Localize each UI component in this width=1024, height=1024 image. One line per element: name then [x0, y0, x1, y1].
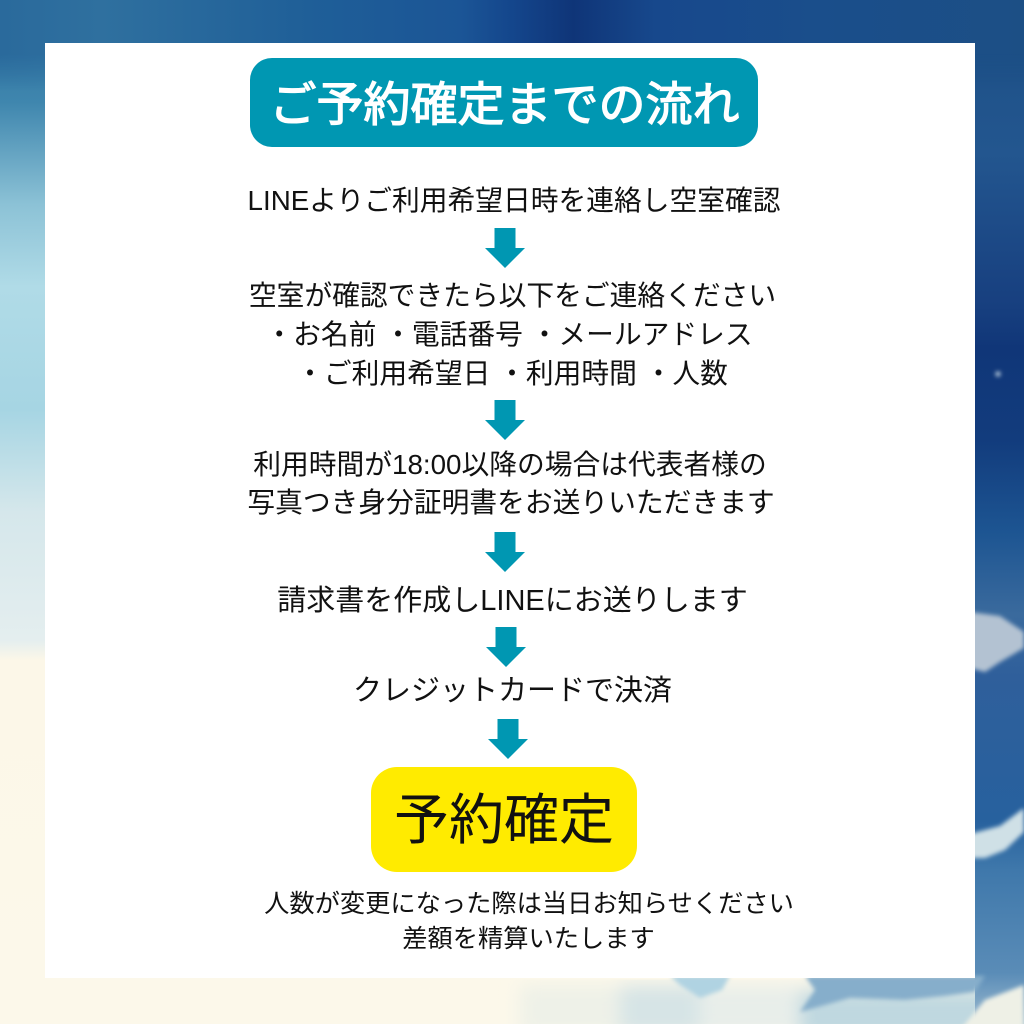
step 2 line 1: 空室が確認できたら以下をご連絡ください [249, 280, 776, 311]
step 1 text: LINEよりご利用希望日時を連絡し空室確認 [248, 185, 780, 216]
arrow 3 [485, 532, 525, 572]
arrow 5 [488, 719, 528, 759]
note line 2: 差額を精算いたします [402, 925, 655, 953]
step 4 text: 請求書を作成しLINEにお送りします [277, 585, 748, 617]
final step badge [371, 767, 637, 872]
arrow 1 [485, 228, 525, 268]
step 2 line 2: ・お名前 ・電話番号 ・メールアドレス [265, 319, 753, 350]
arrow 2 [485, 400, 525, 440]
title banner: ご予約確定までの流れ [270, 78, 740, 131]
step 5 text: クレジットカードで決済 [353, 675, 672, 707]
title banner [250, 58, 758, 147]
step 3 line 2: 写真つき身分証明書をお送りいただきます [247, 487, 775, 518]
step 2 text [249, 280, 776, 389]
arrow 4 [486, 627, 526, 667]
step 2 line 3: ・ご利用希望日 ・利用時間 ・人数 [296, 358, 728, 389]
step 3 text [247, 449, 775, 518]
final step badge: 予約確定 [394, 789, 614, 851]
note line 1: 人数が変更になった際は当日お知らせください [264, 890, 794, 918]
step 3 line 1: 利用時間が18:00以降の場合は代表者様の [253, 449, 767, 480]
